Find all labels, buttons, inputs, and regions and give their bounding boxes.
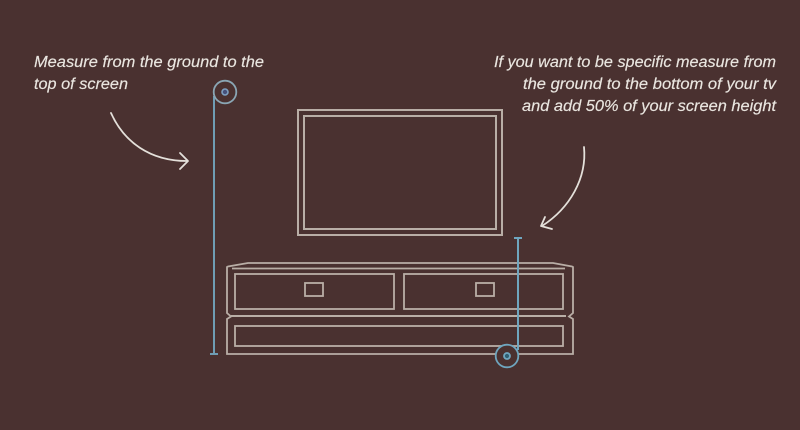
text: measure from ground to top of screen: Measure from the ground to the (34, 54, 264, 71)
text: specific measurement instruction: If you want to be specific measure from (494, 54, 776, 71)
text: measure from ground to top of screen (34, 54, 264, 93)
text: specific measurement instruction: the ground to the bottom of your tv (523, 76, 777, 93)
arrow: left curved arrow (111, 113, 188, 169)
tv screen (298, 110, 502, 235)
blue measure line: ground to top of screen (210, 81, 236, 354)
left drawer (235, 274, 394, 309)
right drawer handle (476, 283, 494, 296)
right drawer (404, 274, 563, 309)
text: measure from ground to top of screen: top of screen (34, 76, 128, 93)
text: specific measurement instruction: and add 50% of your screen height (522, 98, 777, 115)
lower shelf (235, 326, 563, 346)
text: specific measurement instruction (494, 54, 777, 115)
blue measure line: ground to bottom of tv plus half (496, 238, 522, 367)
console outer outline (227, 263, 573, 354)
arrow: right curved arrow (541, 147, 584, 229)
left drawer handle (305, 283, 323, 296)
tv console (227, 263, 573, 354)
